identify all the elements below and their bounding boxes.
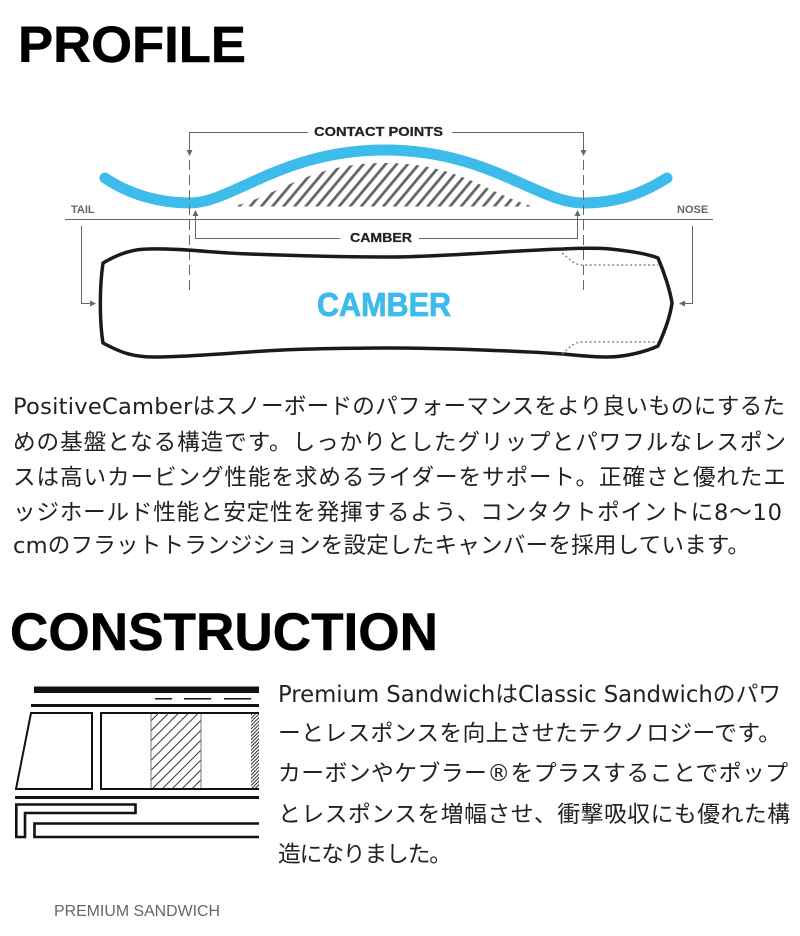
blue camber curve [105, 150, 667, 203]
profile description: PositiveCamberはスノーボードのパフォーマンスをより良いものにするた [13, 394, 785, 420]
profile description: スは高いカービング性能を求めるライダーをサポート。正確さと優れたエ [13, 465, 786, 491]
hatched camber area [233, 163, 533, 206]
baseline [65, 218, 713, 220]
construction caption: PREMIUM SANDWICH [54, 903, 220, 920]
wood core [101, 713, 259, 789]
title: profile: PROFILE [18, 16, 246, 73]
construction description: カーボンやケブラー®をプラスすることでポップ [278, 761, 788, 787]
base edge [16, 804, 135, 837]
label: tail: TAIL [71, 204, 95, 216]
camber wordmark: CAMBER [317, 286, 451, 323]
profile description: ッジホールド性能と安定性を発揮するよう、コンタクトポイントに8～10 [13, 500, 782, 526]
profile description: cmのフラットトランジションを設定したキャンバーを採用しています。 [13, 533, 750, 559]
sidewall [16, 713, 92, 789]
arrowheads [90, 150, 685, 306]
camber profile diagram [65, 124, 713, 357]
construction description: Premium SandwichはClassic Sandwichのパワ [278, 682, 781, 708]
base [34, 824, 259, 837]
construction diagram [15, 686, 259, 837]
construction description: 造になりました。 [278, 842, 452, 868]
lower layer [15, 796, 259, 799]
contact point arrows [82, 132, 692, 304]
construction description [278, 682, 790, 868]
board outline [100, 248, 672, 357]
top sheet layer [34, 686, 259, 693]
dashed layer [155, 698, 251, 700]
label: contact points: CONTACT POINTS [314, 124, 443, 139]
label: camber: CAMBER [350, 230, 413, 245]
nose dotted inserts [562, 253, 658, 354]
profile description [13, 394, 786, 559]
label: nose: NOSE [677, 204, 708, 216]
construction description: ーとレスポンスを向上させたテクノロジーです。 [278, 721, 781, 747]
construction description: とレスポンスを増幅させ、衝撃吸収にも優れた構 [278, 802, 790, 828]
profile description: めの基盤となる構造です。しっかりとしたグリップとパワフルなレスポン [13, 430, 786, 456]
title: construction: CONSTRUCTION [10, 603, 438, 662]
core hatching [151, 713, 201, 789]
